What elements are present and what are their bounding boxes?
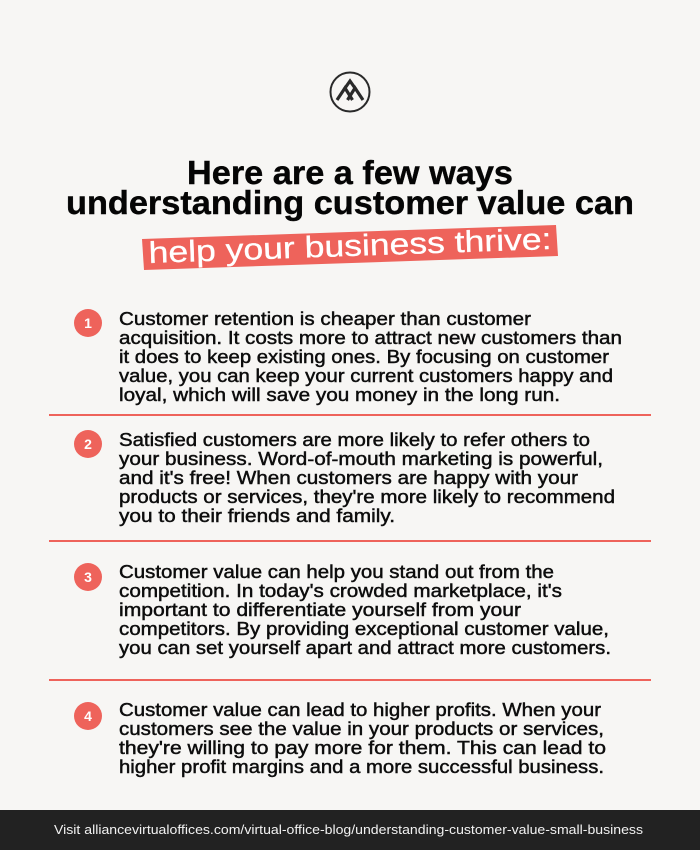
item 1 text: value, you can keep your current customers happy and xyxy=(119,366,613,386)
item 1 text: it does to keep existing ones. By focusing on customer xyxy=(119,347,609,367)
item 1 text: acquisition. It costs more to attract new customers than xyxy=(119,328,622,348)
item 4 xyxy=(74,700,606,777)
item 4 text: higher profit margins and a more successful business. xyxy=(119,757,604,777)
item 4 text: they're willing to pay more for them. This can lead to xyxy=(119,738,606,758)
item 1 text: loyal, which will save you money in the long run. xyxy=(119,385,560,405)
number badge 3 xyxy=(74,563,102,591)
item 4 text xyxy=(119,700,606,777)
number badge 3: 3 xyxy=(84,569,92,585)
item 1 xyxy=(74,309,622,405)
title: understanding customer value can xyxy=(66,184,634,221)
number badge 4 xyxy=(74,702,102,730)
item 2 text xyxy=(119,430,615,526)
item 2 text: your business. Word-of-mouth marketing is powerful, xyxy=(119,449,603,469)
highlighted heading banner: help your business thrive: xyxy=(148,223,552,270)
item 3 text: you can set yourself apart and attract more customers. xyxy=(119,638,611,658)
item 2 text: you to their friends and family. xyxy=(119,506,395,526)
number badge 4: 4 xyxy=(84,708,92,724)
item 2 text: and it's free! When customers are happy with your xyxy=(119,468,578,488)
item 1 text: Customer retention is cheaper than customer xyxy=(119,309,531,329)
item 4 text: customers see the value in your products or services, xyxy=(119,719,604,739)
item 3 text: competitors. By providing exceptional customer value, xyxy=(119,619,609,639)
item 1 text xyxy=(119,309,622,405)
title: Here are a few ways xyxy=(187,154,513,191)
item 3 text: important to differentiate yourself from your xyxy=(119,600,521,620)
title xyxy=(66,154,634,221)
number badge 1 xyxy=(74,309,102,337)
footer bar: Visit alliancevirtualoffices.com/virtual-office-blog/understanding-customer-value-small-business xyxy=(54,822,644,837)
footer bar xyxy=(0,810,700,850)
number badge 1: 1 xyxy=(84,315,92,331)
number badge 2: 2 xyxy=(84,436,92,452)
item 3 xyxy=(74,562,611,658)
item 3 text: Customer value can help you stand out from the xyxy=(119,562,554,582)
item 4 text: Customer value can lead to higher profits. When your xyxy=(119,700,601,720)
icon: logo xyxy=(330,72,370,112)
item 2 xyxy=(74,430,615,526)
number badge 2 xyxy=(74,430,102,458)
item 2 text: Satisfied customers are more likely to refer others to xyxy=(119,430,590,450)
item 2 text: products or services, they're more likely to recommend xyxy=(119,487,615,507)
item 3 text: competition. In today's crowded marketplace, it's xyxy=(119,581,562,601)
item 3 text xyxy=(119,562,611,658)
